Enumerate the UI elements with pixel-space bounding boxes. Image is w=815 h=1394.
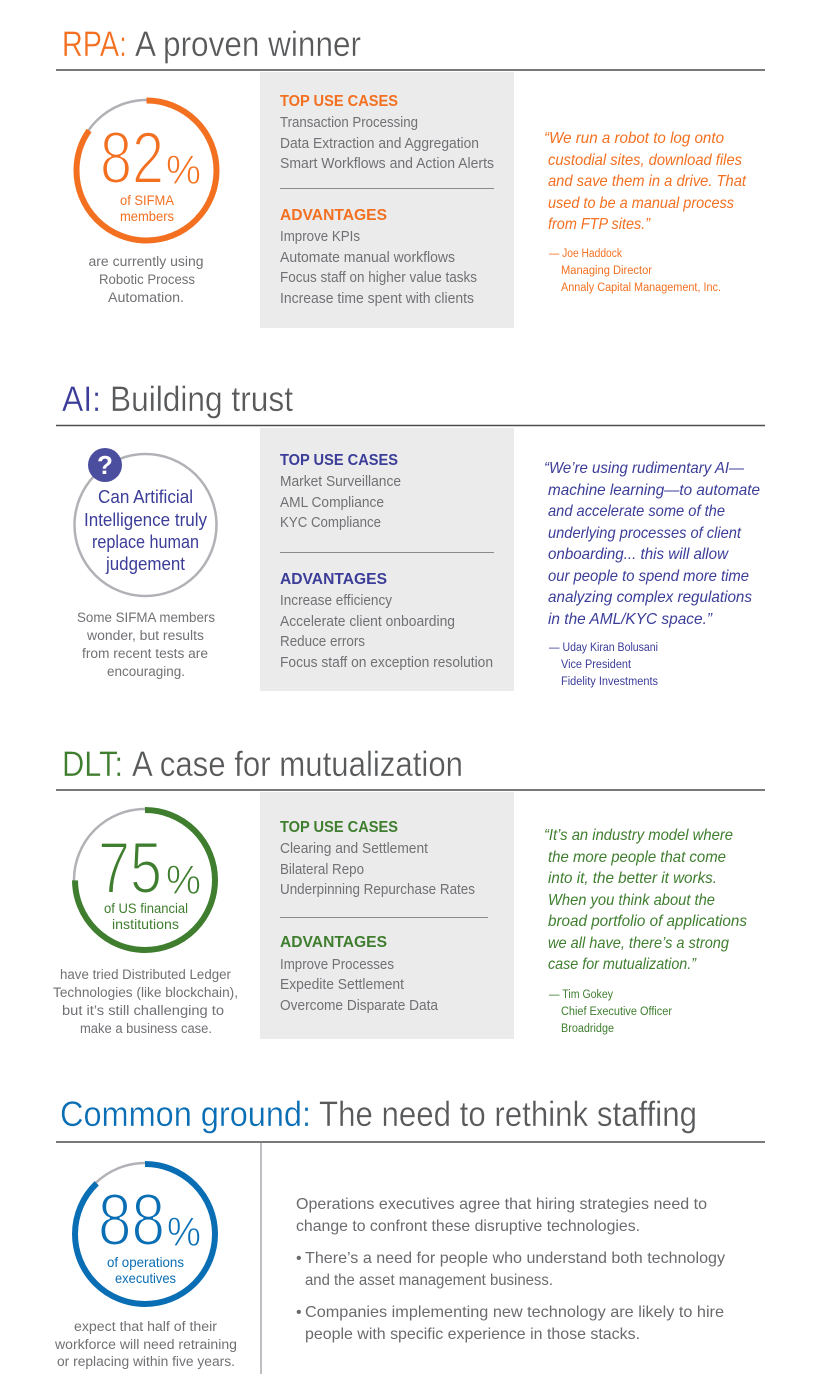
panel: use cases and advantages: KYC Compliance (280, 515, 381, 531)
quote: Joe Haddock: and save them in a drive. That (548, 173, 747, 190)
ring caption: wonder, but results (86, 628, 204, 643)
icon: question mark badge: ? (97, 450, 113, 480)
panel: use cases and advantages (260, 792, 514, 1039)
stat caption: are currently using (88, 254, 204, 269)
stat caption: make a business case. (80, 1021, 212, 1036)
quote: Uday Kiran Bolusani (544, 460, 760, 688)
panel: use cases and advantages: Automate manual workflows (280, 250, 455, 266)
quote: Uday Kiran Bolusani: onboarding... this will allow (548, 546, 729, 563)
stat ring: 88%: executives (115, 1270, 176, 1286)
quote: Uday Kiran Bolusani: “We’re using rudimentary AI— (544, 460, 745, 477)
panel: use cases and advantages: Improve KPIs (280, 229, 360, 245)
panel: use cases and advantages: Overcome Disparate Data (280, 998, 439, 1014)
quote: Tim Gokey: Broadridge (561, 1023, 614, 1035)
icon: question mark badge (88, 448, 122, 482)
panel: use cases and advantages: ADVANTAGES (280, 934, 387, 951)
quote: Uday Kiran Bolusani: — Uday Kiran Bolusani (549, 642, 658, 654)
stat ring: 82%: of SIFMA (120, 192, 175, 208)
heading: RPA: A proven winner (135, 25, 361, 64)
section: AI (56, 380, 765, 691)
stat ring: 82%: 82 (100, 118, 164, 199)
panel: use cases and advantages: Underpinning Repurchase Rates (280, 882, 475, 898)
quote: Uday Kiran Bolusani: Fidelity Investments (561, 676, 658, 688)
heading: Common ground: The need to rethink staffing (319, 1095, 697, 1134)
stat ring: 75%: institutions (112, 916, 179, 932)
panel: use cases and advantages (260, 428, 514, 691)
quote: Tim Gokey: the more people that come (548, 849, 726, 866)
heading: RPA (62, 25, 361, 64)
question ring: replace human (92, 532, 199, 552)
quote: Tim Gokey: into it, the better it works. (548, 870, 717, 887)
panel: use cases and advantages (260, 72, 514, 328)
quote: Joe Haddock: used to be a manual process (548, 195, 734, 212)
stat caption: but it’s still challenging to (62, 1003, 224, 1018)
quote: Tim Gokey: Chief Executive Officer (561, 1006, 672, 1018)
quote: Joe Haddock: — Joe Haddock (549, 248, 622, 260)
quote: Joe Haddock (544, 130, 747, 294)
ring caption: from recent tests are (82, 646, 208, 661)
heading: AI: Building trust (110, 380, 293, 419)
stat ring: 88%: 88 (98, 1180, 165, 1261)
stat caption: Technologies (like blockchain), (53, 985, 238, 1000)
panel: use cases and advantages: Focus staff on exception resolution (280, 655, 493, 671)
panel: use cases and advantages: ADVANTAGES (280, 207, 387, 224)
quote: Uday Kiran Bolusani: in the AML/KYC space.” (548, 611, 713, 628)
quote: Tim Gokey: — Tim Gokey (549, 989, 613, 1001)
stat ring: 88% (74, 1163, 216, 1305)
panel: use cases and advantages: Transaction Processing (280, 115, 418, 131)
panel: use cases and advantages: TOP USE CASES (280, 93, 398, 110)
quote: Uday Kiran Bolusani: analyzing complex regulations (548, 589, 752, 606)
text block: hiring strategies (296, 1196, 725, 1343)
text block: hiring strategies: and the asset management business. (305, 1272, 553, 1289)
section: DLT (53, 745, 765, 1039)
question ring: Can Artificial (98, 487, 193, 507)
stat ring: 75% (74, 809, 216, 951)
stat caption (54, 1319, 237, 1369)
panel: use cases and advantages: Increase efficiency (280, 593, 393, 609)
heading: Common ground (60, 1095, 697, 1134)
stat caption: have tried Distributed Ledger (60, 967, 231, 982)
text block: hiring strategies: change to confront these disruptive technologies. (296, 1218, 640, 1235)
stat ring: 75%: of US financial (104, 900, 188, 916)
question ring: judgement (105, 554, 185, 574)
text block: hiring strategies: Companies implementing new technology are likely to hire (305, 1304, 724, 1321)
heading: AI: AI: (62, 380, 101, 419)
question ring (74, 454, 216, 596)
stat caption: expect that half of their (74, 1319, 218, 1334)
stat ring: 82%: % (166, 147, 201, 193)
quote: Uday Kiran Bolusani: machine learning—to automate (548, 482, 760, 499)
stat caption (53, 967, 238, 1036)
question ring: Intelligence truly (84, 510, 207, 530)
quote: Tim Gokey: we all have, there’s a strong (548, 935, 729, 952)
ring caption: encouraging. (107, 664, 185, 679)
stat ring: 75%: % (166, 857, 201, 903)
stat caption: Automation. (108, 290, 184, 305)
heading: Common ground: Common ground: (60, 1095, 311, 1134)
quote: Joe Haddock: Managing Director (561, 265, 652, 277)
text block: hiring strategies: • (296, 1250, 302, 1267)
quote: Uday Kiran Bolusani: underlying processes of client (548, 525, 742, 542)
panel: use cases and advantages: Increase time spent with clients (280, 291, 474, 307)
panel: use cases and advantages: Clearing and Settlement (280, 841, 428, 857)
ring caption: Some SIFMA members (77, 610, 215, 625)
panel: use cases and advantages: Data Extraction and Aggregation (280, 136, 479, 152)
panel: use cases and advantages: Market Surveillance (280, 474, 401, 490)
panel: use cases and advantages: Bilateral Repo (280, 862, 364, 878)
quote: Joe Haddock: from FTP sites.” (548, 216, 651, 233)
stat ring: 82% (76, 100, 217, 241)
heading: RPA: RPA: (62, 25, 127, 64)
text block: hiring strategies: Operations executives agree that hiring strategies need to (296, 1196, 707, 1213)
panel: use cases and advantages: TOP USE CASES (280, 452, 398, 469)
stat caption: Robotic Process (99, 272, 195, 287)
section: Common ground (54, 1095, 765, 1374)
stat caption: workforce will need retraining (54, 1337, 237, 1352)
panel: use cases and advantages: Smart Workflows and Action Alerts (280, 156, 494, 172)
text block: hiring strategies: people with specific experience in those stacks. (305, 1326, 640, 1343)
quote: Uday Kiran Bolusani: our people to spend more time (548, 568, 749, 585)
panel: use cases and advantages: Improve Processes (280, 957, 394, 973)
heading: DLT: A case for mutualization (132, 745, 463, 784)
quote: Joe Haddock: Annaly Capital Management, Inc. (561, 282, 721, 294)
panel: use cases and advantages: Expedite Settlement (280, 977, 404, 993)
panel: use cases and advantages: Focus staff on higher value tasks (280, 270, 477, 286)
heading: DLT: DLT: (62, 745, 123, 784)
panel: use cases and advantages: Accelerate client onboarding (280, 614, 455, 630)
stat ring: 75%: 75 (98, 828, 162, 909)
quote: Tim Gokey: broad portfolio of applications (548, 913, 747, 930)
panel: use cases and advantages: AML Compliance (280, 495, 384, 511)
text block: hiring strategies: There’s a need for people who understand both technology (305, 1250, 725, 1267)
stat ring: 88%: % (167, 1209, 201, 1255)
stat ring: 88%: of operations (107, 1254, 184, 1270)
quote: Uday Kiran Bolusani: Vice President (561, 659, 632, 671)
section: RPA (56, 25, 765, 328)
ring caption (77, 610, 215, 679)
stat caption: or replacing within five years. (57, 1354, 235, 1369)
quote: Tim Gokey: When you think about the (548, 892, 715, 909)
quote: Joe Haddock: custodial sites, download files (548, 152, 742, 169)
panel: use cases and advantages: Reduce errors (280, 634, 365, 650)
quote: Tim Gokey: case for mutualization.” (548, 956, 697, 973)
text block: hiring strategies: • (296, 1304, 302, 1321)
quote: Tim Gokey: “It’s an industry model where (544, 827, 733, 844)
stat ring: 82%: members (120, 208, 174, 224)
panel: use cases and advantages: ADVANTAGES (280, 571, 387, 588)
quote: Uday Kiran Bolusani: and accelerate some of the (548, 503, 725, 520)
quote: Joe Haddock: “We run a robot to log onto (544, 130, 724, 147)
stat caption (88, 254, 204, 305)
panel: use cases and advantages: TOP USE CASES (280, 819, 398, 836)
quote: Tim Gokey (544, 827, 747, 1035)
